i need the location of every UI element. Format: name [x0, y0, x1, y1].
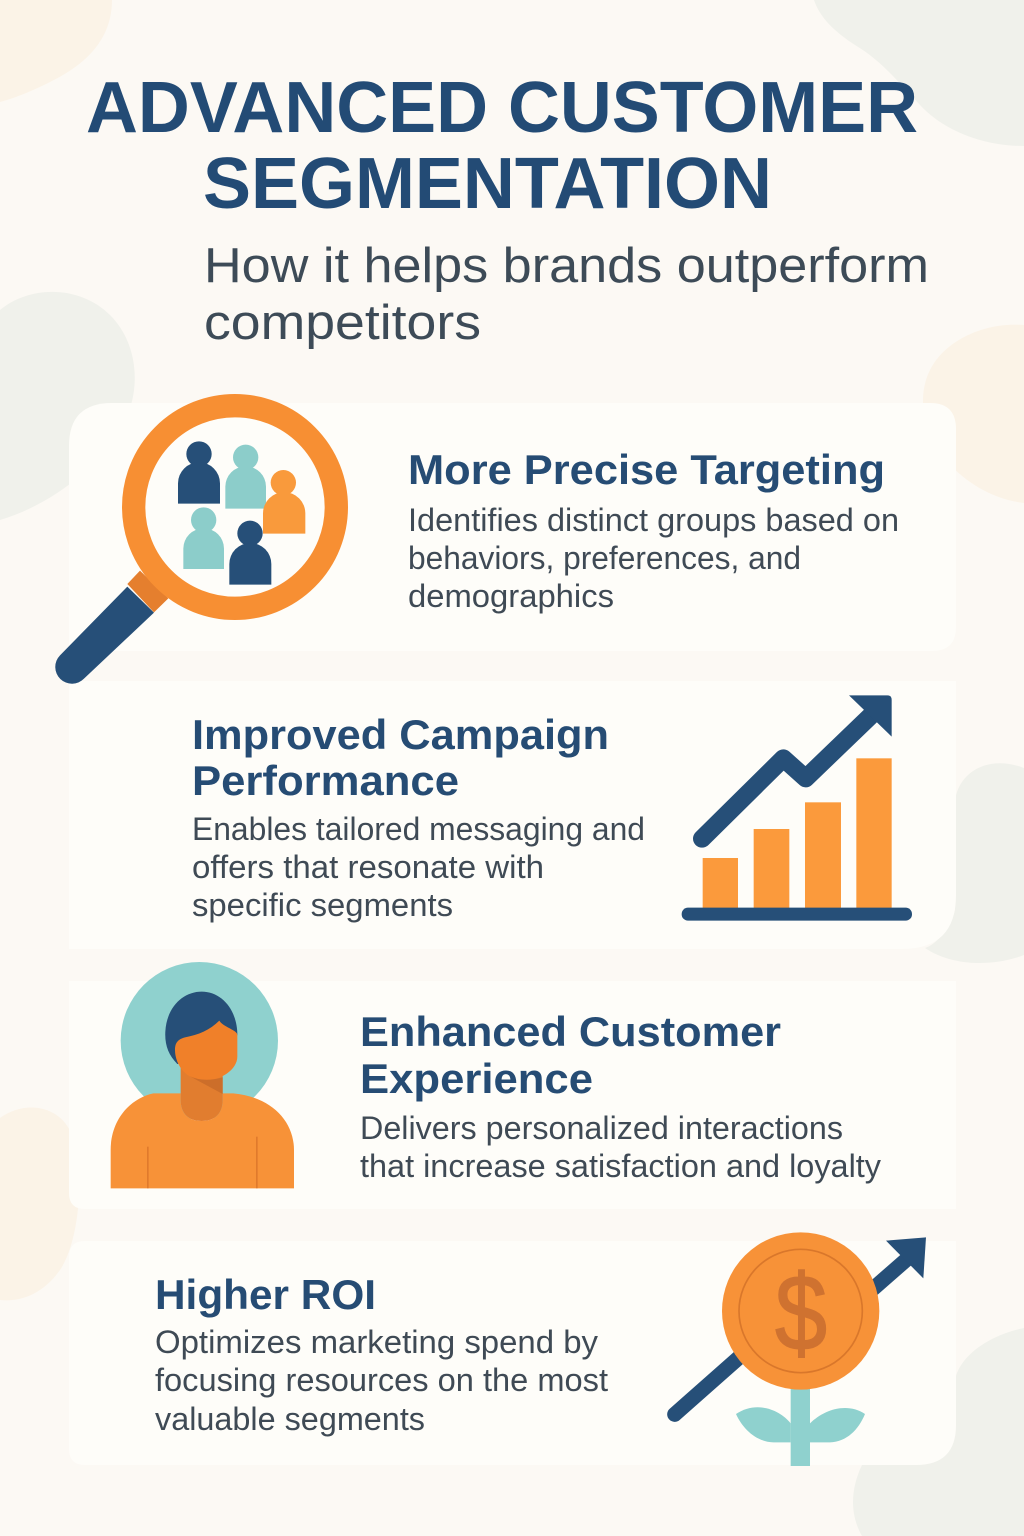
- subtitle: How it helps brands outperform: [204, 239, 929, 293]
- card background: [69, 1241, 956, 1465]
- body text: focusing resources on the most: [155, 1362, 608, 1398]
- body text: demographics: [408, 578, 614, 614]
- body text: that increase satisfaction and loyalty: [360, 1148, 881, 1184]
- heading: Performance: [192, 757, 459, 804]
- title: SEGMENTATION: [203, 144, 772, 224]
- body text: Enables tailored messaging and: [192, 811, 645, 847]
- heading: More Precise Targeting: [408, 446, 885, 493]
- card background: [69, 981, 956, 1209]
- body text: valuable segments: [155, 1401, 425, 1437]
- subtitle: [204, 239, 929, 350]
- heading: Enhanced Customer: [360, 1008, 781, 1055]
- body text: offers that resonate with: [192, 849, 544, 885]
- body text: Delivers personalized interactions: [360, 1110, 843, 1146]
- card background: [69, 403, 956, 651]
- body text: [155, 1324, 608, 1437]
- body text: Optimizes marketing spend by: [155, 1324, 598, 1360]
- title: ADVANCED CUSTOMER: [86, 68, 918, 148]
- body text: specific segments: [192, 887, 453, 923]
- title: [86, 68, 918, 224]
- heading: [192, 711, 609, 804]
- subtitle: competitors: [204, 296, 481, 350]
- panel: higher ROI: [69, 1232, 956, 1466]
- heading: Higher ROI: [155, 1271, 376, 1318]
- icon: coin plant with growth arrow: $: [775, 1252, 827, 1373]
- heading: [360, 1008, 781, 1102]
- panel: improved campaign performance: [69, 681, 956, 949]
- body text: Identifies distinct groups based on: [408, 502, 899, 538]
- body text: [192, 811, 645, 923]
- heading: Experience: [360, 1055, 593, 1102]
- icon: customer portrait: [111, 962, 294, 1188]
- body text: behaviors, preferences, and: [408, 540, 801, 576]
- panel: more precise targeting: [55, 403, 956, 684]
- card background: [69, 681, 956, 949]
- icon: magnifying glass over people: [55, 406, 336, 684]
- body text: [360, 1110, 881, 1184]
- panel: enhanced customer experience: [69, 962, 956, 1209]
- icon: rising bar chart with arrow: [682, 695, 912, 921]
- heading: Improved Campaign: [192, 711, 609, 758]
- icon: coin plant with growth arrow: [675, 1232, 926, 1466]
- body text: [408, 502, 899, 614]
